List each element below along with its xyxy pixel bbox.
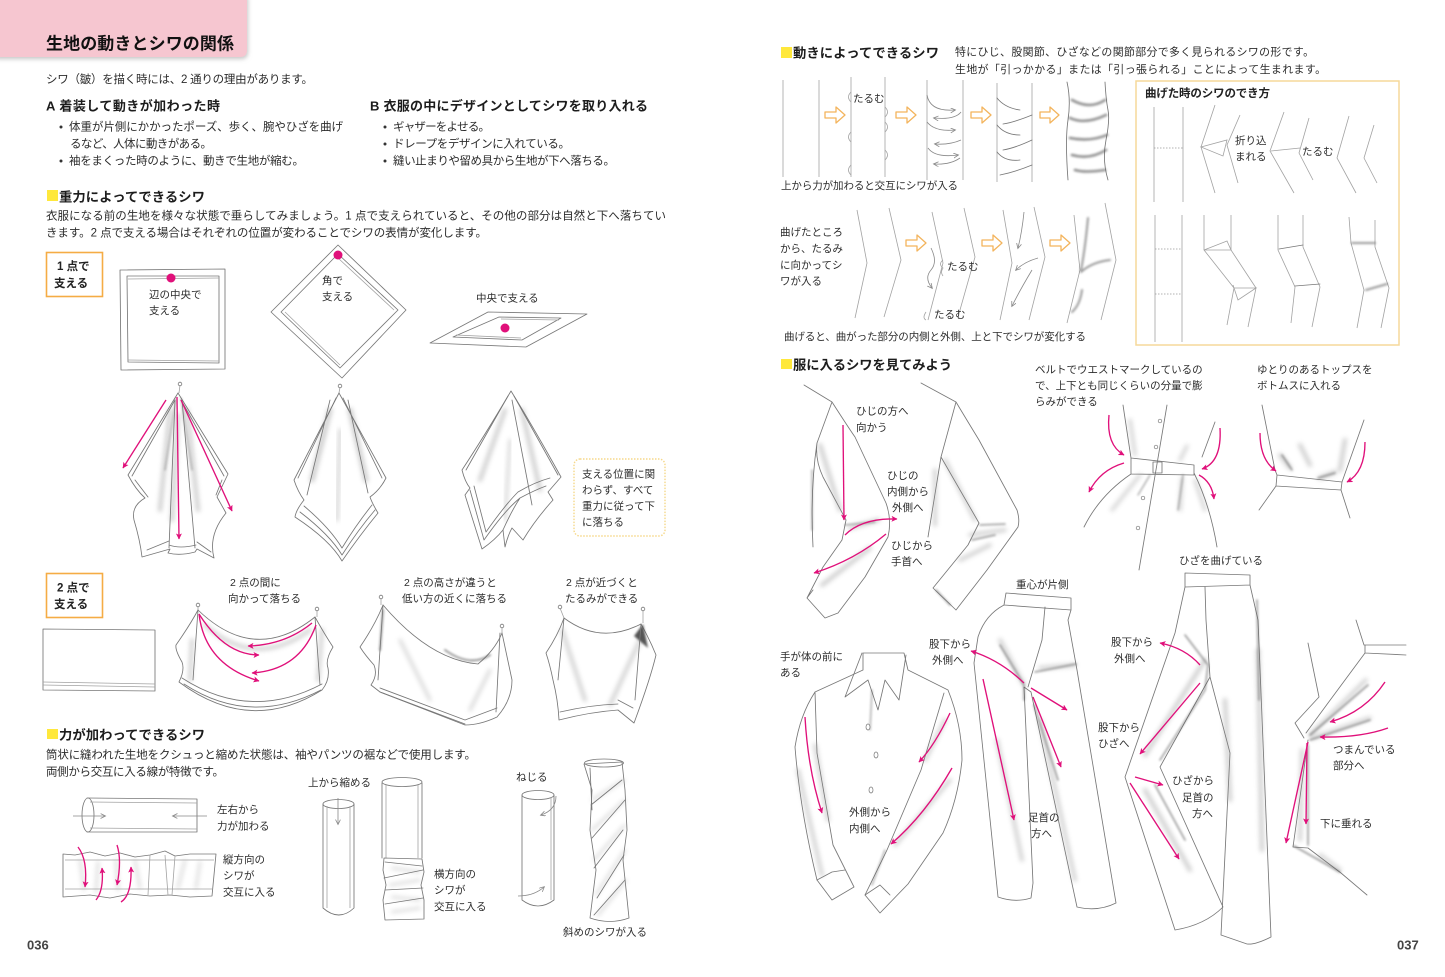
cloth: pins close together bbox=[546, 576, 656, 723]
horizontal cylinder: 左右から bbox=[217, 803, 259, 816]
shirt with arrows: 外側から bbox=[849, 806, 891, 818]
top row folds bbox=[1154, 105, 1377, 202]
panel: right page 037 bbox=[780, 44, 1419, 952]
text block: reason B bbox=[370, 98, 648, 168]
cloth: flat diamond bbox=[271, 245, 406, 378]
arm: bent, with arrows bbox=[804, 385, 933, 618]
compressed cylinder bbox=[382, 778, 486, 920]
shirt with arrows bbox=[795, 653, 962, 913]
tucked top bbox=[1259, 405, 1365, 518]
text block: gravity description: 衣服になる前の生地を様々な状態で垂らしてみましょう。1 点で支えられていると、その他の部分は自然と下へ落ちてい bbox=[46, 208, 666, 222]
arm: bent, with arrows: 向かう bbox=[856, 421, 888, 434]
label box: one point: 1 点で bbox=[57, 259, 90, 273]
text block: bend note: ワが入る bbox=[780, 274, 822, 288]
diagram: bending stages: たるむ bbox=[947, 261, 978, 273]
jeans: weight on one side bbox=[929, 578, 1116, 909]
page number 037: 037 bbox=[1397, 938, 1419, 952]
text block: gravity description bbox=[46, 208, 666, 240]
callout: gravity note: に落ちる bbox=[582, 516, 624, 528]
text block: tucked note: ボトムスに入れる bbox=[1257, 380, 1341, 392]
page number 036: 036 bbox=[27, 938, 49, 952]
cloth: flat square: 辺の中央で bbox=[149, 288, 202, 301]
arrow: stage 1 bbox=[825, 107, 845, 123]
arm: bent, with arrows: 外側へ bbox=[892, 501, 924, 514]
arm: bent, with arrows: ひじの bbox=[887, 470, 918, 482]
text block: reason A: 袖をまくった時のように、動きで生地が縮む。 bbox=[69, 154, 304, 168]
jeans: bent knee: 股下から bbox=[1098, 722, 1140, 734]
arm: bent, plain bbox=[921, 383, 1019, 610]
cloth: pins close together: たるみができる bbox=[565, 592, 638, 605]
title tab: 生地の動きとシワの関係 bbox=[46, 34, 234, 54]
text block: reason A: A 着装して動きが加わった時 bbox=[46, 98, 220, 114]
callout: gravity note: 支える位置に関 bbox=[582, 468, 655, 480]
jeans: bent knee: ひざから bbox=[1172, 774, 1214, 787]
text block: force description: 両側から交互に入る線が特徴です。 bbox=[46, 764, 224, 778]
panel: left page 036 bbox=[0, 0, 666, 952]
label box: two points: 2 点で bbox=[57, 580, 90, 594]
heading: movement wrinkles: 動きによってできるシワ bbox=[793, 44, 939, 60]
panel: how wrinkles form when bent: 曲げた時のシワのでき方 bbox=[1145, 86, 1270, 100]
pinched skirt and hand bbox=[1286, 620, 1406, 895]
twisted cylinder bbox=[563, 759, 647, 938]
cloth: flat square: 支える bbox=[149, 305, 180, 317]
jeans: weight on one side: 方へ bbox=[1031, 827, 1052, 840]
jeans: bent knee: 方へ bbox=[1192, 807, 1213, 820]
text block: force description bbox=[46, 748, 476, 778]
text block: movement description: 特にひじ、股関節、ひざなどの関節部分で多く見られるシワの形です。 bbox=[955, 44, 1314, 58]
diagram: compression stages: たるむ bbox=[853, 93, 884, 105]
top row folds: 折り込 bbox=[1235, 134, 1267, 147]
jeans: weight on one side: 足首の bbox=[1028, 811, 1060, 824]
arm: bent, with arrows: 手首へ bbox=[891, 555, 922, 568]
cloth: hanging from centre bbox=[462, 391, 561, 549]
cloth: draped between two pins: 向かって落ちる bbox=[228, 592, 301, 605]
compressed cylinder: 交互に入る bbox=[434, 901, 486, 913]
cloth: pins at different heights bbox=[360, 576, 512, 725]
belted shirt bbox=[1084, 405, 1220, 570]
compressed cylinder: シワが bbox=[434, 884, 466, 896]
text block: movement description bbox=[955, 44, 1326, 76]
heading: clothing wrinkles: 服に入るシワを見てみよう bbox=[793, 358, 952, 372]
arm: bent, with arrows: ひじから bbox=[891, 540, 933, 552]
pinched skirt and hand: 下に垂れる bbox=[1320, 818, 1372, 830]
cloth: flat square bbox=[120, 269, 225, 370]
callout: gravity note: わらず、すべて bbox=[582, 484, 653, 496]
heading: gravity wrinkles: 重力によってできるシワ bbox=[59, 190, 205, 204]
cloth: draped between two pins: 2 点の間に bbox=[230, 577, 281, 589]
twisted cylinder: 斜めのシワが入る bbox=[563, 926, 647, 938]
text block: force description: 筒状に縫われた生地をクシュっと縮めた状態は、袖やパンツの裾などで使用します。 bbox=[46, 748, 476, 762]
arrow: bend 1 bbox=[906, 235, 926, 251]
cloth: hanging from corner bbox=[294, 384, 386, 561]
top row folds: まれる bbox=[1235, 151, 1266, 163]
cloth: flat lying bbox=[430, 292, 587, 347]
label box: one point bbox=[46, 252, 102, 296]
text block: reason B: ギャザーをよせる。 bbox=[393, 120, 490, 134]
text block: reason A bbox=[46, 98, 344, 168]
label box: one point: 支える bbox=[54, 276, 88, 290]
bottom row folds bbox=[1155, 215, 1389, 342]
gathered cylinder with pink arrows: 交互に入る bbox=[223, 886, 276, 898]
text block: tucked note bbox=[1257, 364, 1372, 392]
jeans: bent knee: 足首の bbox=[1182, 791, 1214, 804]
text block: reason B: ドレープをデザインに入れている。 bbox=[393, 136, 570, 150]
jeans: bent knee: 外側へ bbox=[1114, 652, 1146, 665]
cloth: hanging from edge centre bbox=[123, 382, 232, 558]
horizontal cylinder bbox=[73, 798, 270, 832]
plain cylinder: twist: ねじる bbox=[516, 772, 548, 784]
jeans: bent knee bbox=[1098, 573, 1271, 944]
text block: bend note bbox=[780, 226, 843, 288]
pinched skirt and hand: つまんでいる bbox=[1333, 744, 1395, 756]
label box: two points: 支える bbox=[54, 597, 88, 611]
gathered cylinder with pink arrows: シワが bbox=[223, 869, 255, 882]
arm: bent, with arrows: ひじの方へ bbox=[856, 404, 908, 418]
arrow: bend 3 bbox=[1050, 235, 1070, 251]
heading: force wrinkles: 力が加わってできるシワ bbox=[59, 726, 205, 742]
title tab bbox=[0, 0, 247, 57]
intro text: シワ（皺）を描く時には、2 通りの理由があります。 bbox=[46, 72, 313, 86]
jeans: weight on one side: 股下から bbox=[929, 638, 971, 650]
plain cylinder: compress from above bbox=[308, 776, 371, 915]
shirt with arrows: 内側へ bbox=[849, 822, 880, 835]
text block: belt note bbox=[1035, 364, 1203, 408]
arrow: bend 2 bbox=[982, 235, 1002, 251]
plain cylinder: compress from above: 上から縮める bbox=[308, 776, 371, 789]
text block: belt note: で、上下とも同じくらいの分量で膨 bbox=[1035, 379, 1203, 392]
callout: gravity note bbox=[574, 459, 665, 536]
cloth: flat diamond: 支える bbox=[322, 291, 353, 303]
jeans: bent knee: 股下から bbox=[1111, 636, 1153, 648]
horizontal cylinder: 力が加わる bbox=[217, 820, 270, 832]
callout: gravity note: 重力に従って下 bbox=[582, 500, 655, 512]
caption: compression: 上から力が加わると交互にシワが入る bbox=[781, 179, 958, 192]
diagram: compression stages bbox=[783, 77, 1109, 182]
text block: belt note: らみができる bbox=[1035, 395, 1098, 408]
text: hand note bbox=[780, 650, 843, 679]
compressed cylinder: 横方向の bbox=[434, 868, 476, 880]
cloth: flat rectangle bbox=[43, 629, 155, 691]
gathered cylinder with pink arrows bbox=[63, 845, 276, 902]
diagram: bending stages bbox=[855, 203, 1116, 323]
text block: tucked note: ゆとりのあるトップスを bbox=[1257, 364, 1372, 376]
text block: bend note: から、たるみ bbox=[780, 243, 843, 255]
panel: how wrinkles form when bent bbox=[1136, 81, 1399, 345]
cloth: flat lying: 中央で支える bbox=[476, 292, 539, 304]
text block: movement description: 生地が「引っかかる」または「引っ張られる」ことによって生まれます。 bbox=[955, 62, 1326, 76]
arrow: stage 3 bbox=[971, 107, 991, 123]
jeans: weight on one side: 重心が片側 bbox=[1016, 578, 1068, 591]
text block: belt note: ベルトでウエストマークしているの bbox=[1035, 364, 1203, 376]
arrow: stage 4 bbox=[1040, 107, 1059, 123]
cloth: pins at different heights: 2 点の高さが違うと bbox=[404, 576, 497, 589]
text block: bend note: 曲げたところ bbox=[780, 226, 843, 238]
jeans: weight on one side: 外側へ bbox=[932, 654, 964, 666]
top row folds: たるむ bbox=[1302, 146, 1334, 158]
text block: reason A: るなど、人体に動きがある。 bbox=[70, 136, 212, 150]
arm: bent, with arrows: 内側から bbox=[887, 485, 929, 498]
text block: reason B: 縫い止まりや留め具から生地が下へ落ちる。 bbox=[393, 154, 615, 168]
cloth: draped between two pins bbox=[176, 577, 333, 711]
label: bent knee: ひざを曲げている bbox=[1179, 554, 1263, 567]
pinched skirt and hand: 部分へ bbox=[1333, 760, 1364, 772]
text: hand note: ある bbox=[780, 667, 801, 679]
text block: reason A: 体重が片側にかかったポーズ、歩く、腕やひざを曲げ bbox=[69, 120, 344, 134]
text block: bend note: に向かってシ bbox=[780, 258, 842, 272]
caption: bending: 曲げると、曲がった部分の内側と外側、上と下でシワが変化する bbox=[784, 330, 1086, 343]
cloth: flat diamond: 角で bbox=[322, 274, 343, 287]
text: hand note: 手が体の前に bbox=[780, 650, 843, 663]
gathered cylinder with pink arrows: 縦方向の bbox=[223, 853, 265, 866]
cloth: pins at different heights: 低い方の近くに落ちる bbox=[402, 592, 507, 605]
jeans: bent knee: ひざへ bbox=[1098, 737, 1130, 750]
diagram: bending stages: たるむ bbox=[934, 309, 966, 321]
label box: two points bbox=[46, 574, 102, 618]
cloth: pins close together: 2 点が近づくと bbox=[566, 576, 638, 589]
text block: gravity description: きます。2 点で支える場合はそれぞれの位置が変わることでシワの表情が変化します。 bbox=[46, 226, 487, 240]
arrow: stage 2 bbox=[896, 107, 916, 123]
plain cylinder: twist bbox=[516, 772, 556, 906]
text block: reason B: B 衣服の中にデザインとしてシワを取り入れる bbox=[370, 98, 648, 114]
